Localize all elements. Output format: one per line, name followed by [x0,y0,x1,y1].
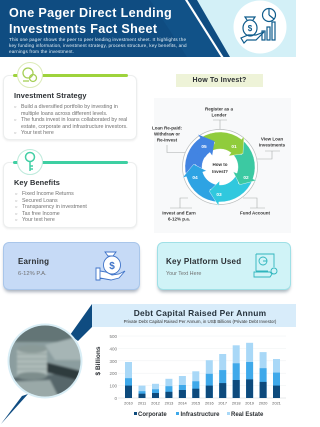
heading: Earning [18,257,49,266]
icon: money bag in hand with chart: $ [248,24,253,33]
panel: key benefits: ○ [15,204,17,209]
panel: process cycle: View Loan [261,137,283,142]
panel: investment strategy: ○ [14,117,16,122]
icon: key [17,149,43,175]
header banner [0,0,296,57]
y axis title: $ Billions [95,346,102,375]
y axis labels: 0 [114,396,117,401]
description: key funding information, investment strategy, process structure, key benefits, and [9,43,187,48]
panel: process cycle: 02 [243,175,249,181]
y axis labels: 500 [109,334,117,339]
icon: money bag in hand with chart [234,0,286,54]
panel: process cycle: 05 [201,144,207,150]
x axis labels: 2012 [151,400,160,406]
panel: process cycle: Loan Re-paid: [152,126,183,131]
y axis labels: 300 [109,359,117,364]
x axis labels: 2017 [218,400,227,406]
panel: investment strategy: The funds invest in loans collaborated by real [21,117,127,123]
chart subtitle: Private Debt Capital Raised Per Annum, in US$ Billions (Private Debt Investor) [124,318,276,324]
panel: process cycle: 03 [216,192,222,198]
x axis labels: 2018 [232,400,241,406]
heading: Key Platform Used [166,257,241,266]
icon: money bag on hand: $ [109,261,115,272]
card: earning [3,242,140,290]
value: Your Text Here [166,271,201,277]
panel: key benefits: Secured Loans [22,198,58,204]
panel: key benefits: ○ [15,198,17,203]
panel: process cycle: Lender [211,113,227,118]
x axis labels: 2011 [138,400,146,406]
title [9,6,172,36]
legend [134,412,264,418]
panel: process cycle: Invest and Earn [162,211,196,216]
panel: process cycle: 01 [231,144,237,150]
panel: process cycle: Re-Invest [157,138,178,143]
y axis labels: 400 [109,346,117,352]
panel: investment strategy: Your text here [21,130,54,136]
photo with diagonal accent [1,304,92,424]
panel: process cycle: Register as a [205,107,234,112]
card: key platform used [157,242,291,290]
panel: process cycle: Fund Account [240,211,271,216]
heading: Key Benefits [14,178,60,187]
panel: process cycle: Withdraw or [154,132,180,137]
panel: key benefits: Transparency in investment [22,204,87,210]
panel: key benefits: ○ [15,217,17,222]
panel: investment strategy: ○ [14,130,16,135]
chart title: Debt Capital Raised Per Annum [134,308,266,318]
panel: process cycle: How to [212,162,228,167]
cycle arrows [178,127,265,213]
panel: investment strategy: ○ [14,104,16,109]
series: corporate [125,379,280,398]
y axis labels: 200 [109,371,117,376]
description: earnings from the investment. [9,49,74,54]
series: infrastructure [125,362,280,398]
y axis labels [109,334,117,401]
panel: key benefits: ○ [15,191,17,196]
panel: key benefits: ○ [15,211,17,216]
x axis labels: 2021 [272,400,281,406]
description [9,36,187,54]
panel: key benefits: Your text here [22,217,55,223]
panel: investment strategy [3,62,137,141]
icon: scroll [254,254,278,278]
x axis labels: 2019 [245,400,254,406]
panel: key benefits: Tax free Income [22,211,60,217]
icon: coins [17,62,43,88]
value: 6-12% P.A. [18,271,47,277]
panel: key benefits [3,149,137,229]
x axis labels: 2014 [178,400,188,406]
heading: Investment Strategy [14,91,87,100]
panel: process cycle: 04 [192,175,198,181]
x axis labels: 2015 [191,400,200,406]
panel: key benefits: Fixed Income Returns [22,191,74,197]
panel: process cycle [154,98,291,233]
title: Investments Fact Sheet [9,22,157,36]
chart header band [92,304,296,327]
x axis labels: 2013 [165,400,173,406]
panel: process cycle: Investments [259,143,286,148]
x axis labels: 2016 [205,400,214,406]
legend: Real Estate [231,412,264,418]
legend: Corporate [138,412,167,418]
stacked bar chart [95,334,286,418]
description: This one pager shows the peer to peer lending investment sheet. It highlights the [9,36,186,42]
panel: investment strategy: estate, corporate and infrastructure investors. [21,124,128,130]
heading: how to invest: How To Invest? [192,77,246,84]
series: real estate [125,343,280,398]
panel: investment strategy: multiple loans across different levels. [21,111,107,117]
icon: money bag on hand [96,252,126,280]
panel: process cycle: 6-12% p.a. [168,217,190,222]
heading: how to invest [176,74,263,87]
panel: investment strategy: Build a diversified portfolio by investing in [21,104,118,110]
x axis labels: 2020 [259,400,268,406]
title: One Pager Direct Lending [9,6,172,20]
panel: process cycle: Invest? [212,169,228,174]
x axis labels: 2010 [124,400,134,406]
y axis labels: 100 [109,384,117,388]
x axis labels [124,400,281,406]
bullet list [15,191,87,223]
legend: Infrastructure [180,412,220,418]
bullet list [14,104,128,136]
